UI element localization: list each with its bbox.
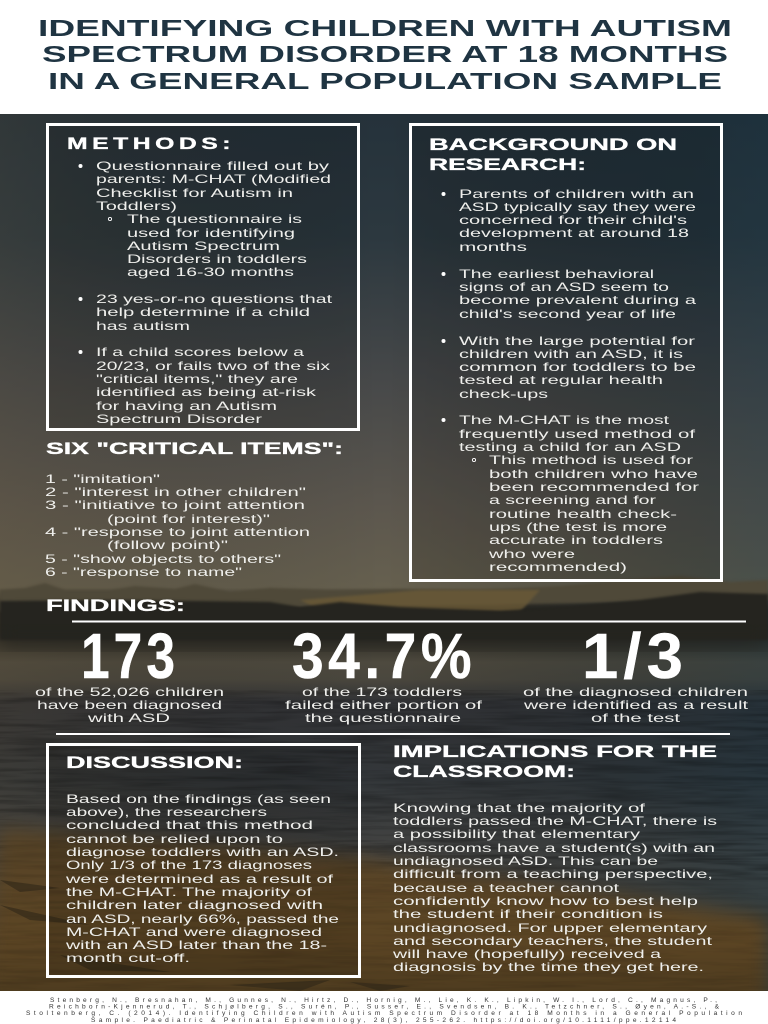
stat: 173: have been diagnosed (37, 699, 222, 712)
methods bullet list: Spectrum Disorder (96, 413, 262, 426)
title (38, 15, 732, 94)
implications body: toddlers passed the M-CHAT, there is (393, 815, 717, 828)
background bullet list: testing a child for an ASD (459, 441, 681, 454)
discussion body: Based on the findings (as seen (66, 793, 331, 806)
background bullet list: routine health check- (489, 508, 677, 521)
background bullet list: frequently used method of (459, 428, 696, 441)
background bullet list: become prevalent during a (459, 294, 697, 307)
stat: 1/3 (522, 620, 749, 725)
background bullet list: The M-CHAT is the most (459, 414, 670, 427)
stat: 1/3: of the diagnosed children (523, 686, 748, 699)
background bullet list: common for toddlers to be (459, 361, 696, 374)
stat: 34.7%: the questionnaire (305, 712, 461, 725)
background bullet list: accurate in toddlers (489, 534, 663, 547)
heading: methods: METHODS: (67, 135, 235, 153)
background bullet list: both children who have (489, 468, 698, 481)
implications body: and secondary teachers, the student (393, 935, 713, 948)
footer citation: Stenberg, N., Bresnahan, M., Gunnes, N., Hirtz, D., Hornig, M., Lie, K. K., Lipkin, W. I., Lord, C., Magnus, P., (50, 997, 717, 1004)
methods bullet list: identified as being at-risk (96, 386, 316, 399)
implications body: difficult from a teaching perspective, (393, 868, 713, 881)
implications body: will have (hopefully) received a (391, 948, 662, 961)
critical items list: 3 - "initiative to joint attention (45, 499, 305, 512)
stat: 1/3: 1/3 (582, 620, 688, 692)
methods bullet list: Disorders in toddlers (127, 253, 307, 266)
discussion body: month cut-off. (66, 952, 190, 965)
title: IN A GENERAL POPULATION SAMPLE (48, 68, 722, 94)
header band (0, 0, 768, 114)
background bullet list: tested at regular health (459, 374, 663, 387)
discussion body: the M-CHAT. The majority of (66, 886, 313, 899)
background bullet list: development at around 18 (459, 227, 689, 240)
background bullet list: With the large potential for (459, 335, 695, 348)
implications body: classrooms have a student(s) with an (393, 842, 715, 855)
methods bullet list: 20/23, or fails two of the six (96, 360, 330, 373)
critical items list: 1 - "imitation" (45, 473, 160, 486)
stat: 173: of the 52,026 children (35, 686, 224, 699)
discussion body: diagnose toddlers with an ASD. (66, 846, 339, 859)
stat: 173: 173 (81, 620, 179, 692)
implications body: undiagnosed ASD. This can be (393, 855, 658, 868)
methods bullet list: help determine if a child (96, 306, 310, 319)
discussion body: M-CHAT and were diagnosed (66, 926, 322, 939)
background bullet list: been recommended for (489, 481, 699, 494)
panel: background on research (410, 124, 722, 580)
critical items list: (follow point)" (107, 539, 228, 552)
panel: methods (48, 124, 358, 430)
stat: 1/3: of the test (591, 712, 681, 725)
implications body (391, 802, 717, 974)
implications body: diagnosis by the time they get here. (393, 961, 704, 974)
methods bullet list: used for identifying (127, 227, 295, 240)
implications body: the student if their condition is (393, 908, 663, 921)
stat: 34.7%: of the 173 toddlers (302, 686, 462, 699)
methods bullet list: for having an Autism (96, 400, 277, 413)
footer citation (0, 991, 768, 1024)
implications body: Knowing that the majority of (393, 802, 646, 815)
footer citation: Sample. Paediatric & Perinatal Epidemiology, 28(3), 255-262. https://doi.org/10.1111/ppe.12114 (91, 1017, 676, 1024)
methods bullet list: Autism Spectrum (127, 240, 280, 253)
panel: implications for the classroom (391, 743, 717, 974)
implications body: because a teacher cannot (393, 882, 620, 895)
stat: 173 (35, 620, 224, 725)
implications body: a possibility that elementary (393, 828, 640, 841)
heading: background on research: RESEARCH: (429, 156, 586, 174)
heading: discussion: DISCUSSION: (66, 754, 243, 772)
heading: implications: CLASSROOM: (393, 763, 575, 781)
background bullet list: Parents of children with an (459, 188, 694, 201)
methods bullet list: has autism (96, 320, 190, 333)
methods bullet list: The questionnaire is (127, 213, 302, 226)
background bullet list: check-ups (459, 388, 548, 401)
stat: 173: with ASD (86, 712, 170, 725)
background bullet list: signs of an ASD seem to (459, 281, 669, 294)
methods bullet list: Checklist for Autism in (96, 187, 293, 200)
methods bullet list: aged 16-30 months (127, 266, 294, 279)
methods bullet list: Questionnaire filled out by (96, 160, 329, 173)
critical items list: 2 - "interest in other children" (45, 486, 306, 499)
heading: findings: FINDINGS: (46, 597, 185, 615)
discussion body: above), the researchers (66, 806, 267, 819)
stat: 34.7%: failed either portion of (285, 699, 483, 712)
methods bullet list: If a child scores below a (96, 346, 305, 359)
discussion body: with an ASD later than the 18- (64, 939, 327, 952)
background bullet list: a screening and for (489, 494, 656, 507)
footer citation: Stoltenberg, C. (2014). Identifying Children with Autism Spectrum Disorder at 18 Months in a General Population (26, 1010, 742, 1017)
discussion body: children later diagnosed with (66, 899, 323, 912)
panel: findings (35, 597, 749, 735)
critical items list: 5 - "show objects to others" (45, 553, 281, 566)
background bullet list: This method is used for (489, 454, 693, 467)
background bullet list: who were (487, 548, 575, 561)
discussion body (64, 793, 339, 965)
critical items list: (point for interest)" (107, 513, 270, 526)
heading: background on research (429, 136, 677, 174)
heading: implications (393, 743, 717, 781)
background bullet list: child's second year of life (459, 308, 676, 321)
methods bullet list: "critical items," they are (96, 373, 298, 386)
discussion body: an ASD, nearly 66%, passed the (66, 913, 339, 926)
stat: 34.7% (285, 620, 483, 725)
implications body: undiagnosed. For upper elementary (393, 922, 707, 935)
background bullet list: concerned for their child's (459, 214, 687, 227)
discussion body: Only 1/3 of the 173 diagnoses (66, 859, 312, 872)
critical items list: 6 - "response to name" (45, 566, 242, 579)
stat: 1/3: were identified as a result (522, 699, 749, 712)
discussion body: were determined as a result of (64, 873, 334, 886)
background bullet list: ups (the test is more (489, 521, 667, 534)
title: SPECTRUM DISORDER AT 18 MONTHS (42, 41, 728, 67)
implications body: confidently know how to best help (393, 895, 698, 908)
background bullet list: recommended) (489, 561, 627, 574)
heading: implications: IMPLICATIONS FOR THE (393, 743, 717, 761)
stat: 34.7%: 34.7% (292, 620, 476, 692)
background bullet list: ASD typically say they were (459, 201, 696, 214)
discussion body: cannot be relied upon to (66, 833, 283, 846)
footer citation: Reichborn-Kjennerud, T., Schjølberg, S., Surén, P., Susser, E., Svendsen, B. K., Tetzchner, S., Øyen, A.-S., & (49, 1004, 720, 1010)
background bullet list: months (459, 241, 527, 254)
background bullet list: The earliest behavioral (459, 268, 654, 281)
methods bullet list: Toddlers) (96, 200, 177, 213)
title: IDENTIFYING CHILDREN WITH AUTISM (38, 15, 732, 41)
critical items list (45, 473, 310, 579)
heading: background on research: BACKGROUND ON (429, 136, 677, 154)
panel: six critical items (45, 440, 343, 579)
critical items list: 4 - "response to joint attention (45, 526, 310, 539)
methods bullet list: parents: M-CHAT (Modified (96, 173, 331, 186)
discussion body: concluded that this method (66, 819, 313, 832)
background bullet list (442, 188, 699, 574)
panel: discussion (48, 744, 360, 976)
background bullet list: children with an ASD, it is (459, 348, 683, 361)
methods bullet list (78, 160, 333, 426)
methods bullet list: 23 yes-or-no questions that (96, 293, 333, 306)
heading: six critical items: SIX "CRITICAL ITEMS": (46, 440, 343, 458)
